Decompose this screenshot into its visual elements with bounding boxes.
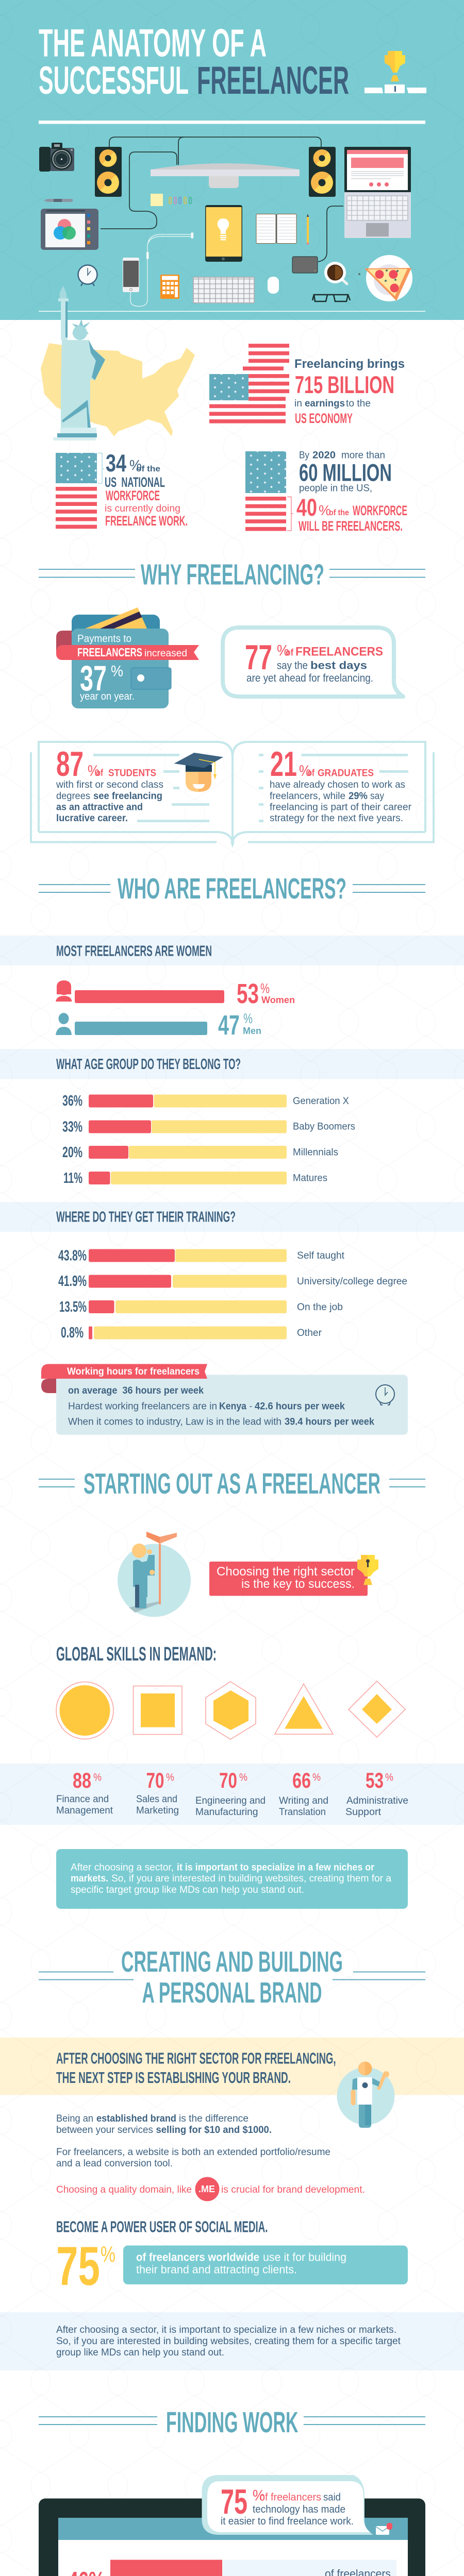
- icon: paperclips: [169, 197, 191, 204]
- stat: 715 billion: Freelancing brings: [294, 357, 405, 371]
- panel: working hours: Working hours for freelancers: [67, 1366, 200, 1377]
- heading: finding work: FINDING WORK: [166, 2406, 298, 2439]
- chart: age group bars: Generation X: [293, 1096, 349, 1107]
- panel: tablet with work sources: [39, 2475, 425, 2576]
- stats: skills percentages: 70: [219, 1768, 237, 1792]
- callout: 75 percent technology: %: [253, 2487, 265, 2504]
- icon: diamond shape: [349, 1681, 405, 1737]
- panel: open book stats: [31, 742, 434, 848]
- icon: smartphone: [123, 258, 139, 292]
- heading: why freelancing: WHY FREELANCING?: [141, 558, 324, 591]
- stats: skills percentages: Finance and: [56, 1794, 109, 1805]
- chart: gender bars: Women: [261, 995, 295, 1005]
- icon: desktop monitor: [151, 163, 300, 188]
- text: brand paragraphs: is the difference: [179, 2113, 248, 2124]
- icon: left speaker: [95, 147, 122, 197]
- text: brand paragraphs: is crucial for brand development.: [221, 2184, 365, 2195]
- text: specialize band: After choosing a sector, it is important to specialize in a few niches or markets.: [56, 2325, 396, 2335]
- callout: choosing the right sector: Choosing the right sector: [217, 1565, 355, 1579]
- stats: skills percentages: Translation: [279, 1807, 326, 1818]
- page lines: [93, 754, 408, 822]
- stats: skills percentages: Writing and: [279, 1795, 328, 1806]
- icon: USA map: [41, 343, 195, 436]
- stat: 21 percent graduates: freelancing is part of their career: [270, 802, 412, 813]
- stats: skills percentages: %: [312, 1771, 321, 1784]
- title: FREELANCER: [197, 59, 349, 103]
- icon: open notebook: [256, 214, 296, 243]
- stat: 60 million: WILL BE FREELANCERS.: [299, 518, 403, 534]
- icon: glasses: [312, 295, 350, 301]
- text: brand paragraphs: .ME: [198, 2184, 215, 2194]
- icon: trophy with keyhole: [357, 1555, 378, 1585]
- heading: training: WHERE DO THEY GET THEIR TRAINING?: [56, 1209, 236, 1225]
- callout: 77 percent speech bubble: [223, 628, 403, 697]
- panel: working hours: 39.4 hours per week: [285, 1417, 374, 1427]
- stats: skills percentages: 66: [292, 1768, 311, 1792]
- icon: keyboard: [193, 277, 255, 303]
- chart: training bars: 41.9%: [58, 1273, 87, 1290]
- chart: age group bars: Matures: [293, 1173, 327, 1184]
- icon: calculator: [160, 275, 179, 299]
- chart: gender bars: Men: [243, 1026, 261, 1036]
- stat: 60 million: WORKFORCE: [353, 503, 407, 518]
- text: brand paragraphs: and a lead conversion tool.: [56, 2158, 173, 2169]
- panel: working hours: -: [250, 1401, 252, 1412]
- stat: 87 percent students: 87: [56, 744, 84, 784]
- stat: 60 million: %: [319, 502, 331, 518]
- stat: 21 percent graduates: 29%: [349, 791, 368, 802]
- stat: 34 percent: is currently doing: [105, 503, 180, 514]
- chart: training bars: On the job: [297, 1302, 343, 1313]
- heading: social media: BECOME A POWER USER OF SOCIAL MEDIA.: [56, 2217, 268, 2236]
- heading: establishing your brand: [56, 2049, 336, 2087]
- callout: 77 percent speech bubble: say the: [277, 659, 308, 672]
- stat: 87 percent students: degrees: [56, 791, 90, 802]
- stats: skills percentages: Marketing: [136, 1805, 179, 1816]
- icon: trophy on podium: [364, 51, 426, 93]
- stat: 87 percent students: [56, 744, 163, 824]
- callout: 75 percent technology: it easier to find freelance work.: [221, 2516, 354, 2527]
- icon: woman: [56, 980, 72, 1002]
- stat: 715 billion: to the: [346, 398, 371, 409]
- stat: 21 percent graduates: freelancers, while: [270, 791, 345, 802]
- stat: 715 billion: earnings: [305, 398, 345, 409]
- icon: pencil: [307, 214, 309, 244]
- icon: coffee cup: [324, 262, 347, 284]
- text: brand paragraphs: Being an: [56, 2113, 93, 2124]
- callout: 77 percent speech bubble: are yet ahead for freelancing.: [246, 672, 373, 684]
- icon: hard drive: [292, 257, 318, 273]
- flag: earnings: [209, 344, 289, 423]
- heading: creating and building a personal brand: A PERSONAL BRAND: [142, 1976, 322, 2009]
- book outline: [31, 742, 434, 842]
- chart: age group bars: 33%: [62, 1119, 82, 1136]
- heading: establishing your brand: THE NEXT STEP IS ESTABLISHING YOUR BRAND.: [56, 2069, 291, 2087]
- panel: specialize note: it is important to specialize in a few niches or: [177, 1862, 375, 1873]
- callout: 77 percent speech bubble: 77: [245, 638, 272, 677]
- icon: clock: [376, 1385, 394, 1405]
- chart: training bars: 43.8%: [58, 1248, 87, 1264]
- chart: age group bars: 36%: [62, 1093, 82, 1109]
- stat: 21 percent graduates: have already chosen to work as: [270, 779, 405, 790]
- band: specialise text: [0, 2312, 464, 2370]
- stats: skills percentages: [56, 1768, 408, 1818]
- icon: shield shape: [206, 1682, 256, 1739]
- stats: skills percentages: 53: [366, 1768, 384, 1792]
- icon: laptop: [344, 147, 411, 238]
- band: age group: [0, 1049, 464, 1079]
- panel: wallet payments: 37: [80, 658, 107, 698]
- stat: 34 percent: 34: [106, 449, 126, 477]
- stat: 34 percent: US NATIONAL: [105, 474, 165, 490]
- text: brand paragraphs: established brand: [96, 2113, 176, 2124]
- stat: 75 percent social: use it for building: [263, 2250, 346, 2264]
- panel: wallet payments: year on year.: [80, 691, 135, 702]
- chart: gender bars: [56, 978, 295, 1041]
- chart: age group bars: 20%: [62, 1144, 82, 1161]
- panel: working hours: When it comes to industry, Law is in the lead with: [68, 1417, 281, 1427]
- callout: 75 percent technology: technology has made: [253, 2504, 345, 2515]
- stat: 87 percent students: STUDENTS: [108, 768, 156, 779]
- panel: specialize note: markets.: [71, 1873, 108, 1884]
- stats: skills percentages: %: [385, 1771, 393, 1784]
- stat: 60 million: 60 MILLION: [299, 459, 392, 486]
- panel: specialize note: After choosing a sector,: [71, 1862, 174, 1873]
- chart: age group bars: Baby Boomers: [293, 1121, 355, 1132]
- stat: 715 billion: in: [294, 398, 302, 409]
- stat: 87 percent students: as an attractive and: [56, 802, 143, 813]
- stats: skills percentages: Management: [56, 1805, 113, 1816]
- title: SUCCESSFUL: [39, 59, 189, 103]
- stat: 21 percent graduates: 21: [270, 744, 297, 784]
- icon: square shape: [133, 1686, 182, 1734]
- chart: training bars: Self taught: [297, 1250, 345, 1261]
- stat: 60 million: [296, 450, 407, 534]
- flag: 34 percent: [56, 453, 104, 529]
- callout: 77 percent speech bubble: FREELANCERS: [295, 645, 383, 658]
- icon: mouse: [268, 277, 279, 294]
- callout: 77 percent speech bubble: best days: [310, 659, 367, 672]
- text: brand paragraphs: selling for $10 and $1000.: [156, 2125, 272, 2136]
- panel: working hours: on average 36 hours per week: [68, 1385, 204, 1396]
- stat: 60 million: more than: [341, 450, 385, 461]
- stats: skills percentages: 70: [146, 1768, 164, 1792]
- stat: 87 percent students: of: [96, 768, 104, 778]
- stats: skills percentages: Support: [345, 1807, 382, 1818]
- icon: camera: [39, 143, 74, 172]
- chart: gender bars: %: [260, 981, 270, 996]
- header background: [0, 0, 464, 320]
- text: specialize band: [56, 2325, 401, 2358]
- text: brand paragraphs: [56, 2113, 365, 2201]
- panel: wallet payments: FREELANCERS: [77, 646, 142, 659]
- chart: training bars: 13.5%: [59, 1299, 87, 1315]
- stats: skills percentages: 88: [73, 1768, 91, 1792]
- stat: 34 percent: of the: [136, 465, 160, 473]
- stat: 21 percent graduates: say: [370, 791, 384, 802]
- icon: pizza plate: [358, 255, 412, 301]
- chart: gender bars: 47: [218, 1010, 240, 1041]
- skills shapes: [56, 1681, 405, 1739]
- heading: global skills: GLOBAL SKILLS IN DEMAND:: [56, 1643, 217, 1665]
- callout: 77 percent speech bubble: %: [277, 642, 289, 659]
- icon: statue of liberty: [53, 286, 105, 440]
- stat: 75 percent social: of freelancers worldwide: [136, 2250, 259, 2264]
- chart: gender bars: %: [243, 1011, 253, 1026]
- stat: 34 percent: %: [129, 457, 142, 473]
- callout: 77 percent speech bubble: of: [286, 647, 294, 657]
- stat: 60 million: people in the US,: [299, 483, 372, 494]
- stat: 87 percent students: see freelancing: [93, 791, 162, 802]
- stats: skills percentages: %: [239, 1771, 247, 1784]
- text: brand paragraphs: between your services: [56, 2125, 153, 2136]
- heading: age group: WHAT AGE GROUP DO THEY BELONG TO?: [56, 1056, 241, 1073]
- stat: 75 percent social: [56, 2235, 408, 2297]
- icon: person at signpost: [118, 1532, 191, 1617]
- icon: graphics tablet: [41, 209, 98, 250]
- chart: gender bars: 53: [237, 978, 259, 1009]
- flag: 2020 projection: [245, 451, 293, 531]
- title: [39, 22, 349, 103]
- panel: wallet payments: [56, 607, 199, 708]
- stat: 60 million: 40: [296, 494, 317, 521]
- icon: wires: [101, 137, 343, 262]
- stat: 34 percent: [105, 449, 188, 529]
- stat: 21 percent graduates: of: [307, 768, 315, 778]
- icon: man: [56, 1013, 72, 1035]
- chart: training bars: 0.8%: [61, 1325, 84, 1341]
- icon: mail: [376, 2523, 392, 2535]
- stat: 87 percent students: lucrative career.: [56, 813, 128, 824]
- stat: 21 percent graduates: strategy for the next five years.: [270, 813, 403, 824]
- chart: training bars: [58, 1248, 407, 1341]
- desk illustration: [39, 137, 412, 306]
- stat: 34 percent: FREELANCE WORK.: [105, 513, 188, 529]
- stat: 715 billion: US ECONOMY: [295, 411, 353, 426]
- stat: 87 percent students: %: [88, 762, 100, 779]
- chart: training bars: Other: [297, 1328, 322, 1338]
- title: THE ANATOMY OF A: [39, 22, 267, 65]
- icon: circle shape: [56, 1682, 113, 1739]
- stats: skills percentages: %: [93, 1771, 102, 1784]
- stats: skills percentages: Manufacturing: [195, 1807, 258, 1818]
- panel: wallet payments: increased: [144, 648, 187, 659]
- chart: training bars: University/college degree: [297, 1276, 407, 1287]
- stat: 60 million: of the: [329, 509, 349, 517]
- icon: triangle shape: [275, 1684, 333, 1734]
- band: brand heading: [0, 2038, 464, 2095]
- icon: right speaker: [309, 147, 336, 197]
- stat: 75 percent social: %: [101, 2242, 115, 2267]
- callout: 75 percent technology: 75: [221, 2482, 247, 2521]
- panel: working hours: Kenya: [219, 1401, 246, 1412]
- icon: earphones cable: [130, 233, 193, 306]
- stat: 34 percent: WORKFORCE: [106, 488, 160, 503]
- panel: specialize note: So, if you are interested in building websites, creating them for a: [111, 1873, 391, 1884]
- stat: 21 percent graduates: GRADUATES: [318, 768, 374, 779]
- stat: 75 percent social: their brand and attracting clients.: [136, 2263, 297, 2276]
- white rule: [39, 121, 425, 124]
- callout: choosing the right sector: is the key to success.: [241, 1577, 355, 1591]
- band: most freelancers: [0, 936, 464, 965]
- callout: 75 percent technology: of freelancers: [259, 2492, 321, 2503]
- stat: 715 billion: [294, 357, 405, 426]
- panel: wallet payments: %: [111, 663, 123, 680]
- chart: age group bars: [62, 1093, 355, 1187]
- stat: 75 percent social: 75: [56, 2235, 100, 2297]
- icon: alarm clock: [78, 265, 97, 286]
- chart: age group bars: 11%: [63, 1170, 82, 1187]
- panel: working hours: Hardest working freelancers are in: [68, 1401, 217, 1412]
- heading: creating and building a personal brand: [39, 1945, 425, 2009]
- band: training: [0, 1202, 464, 1232]
- icon: waving person: [337, 2062, 395, 2128]
- panel: working hours: 42.6 hours per week: [255, 1401, 345, 1412]
- stat: 87 percent students: with first or second class: [56, 779, 163, 790]
- text: specialize band: So, if you are interested in building websites, creating them for a specific target: [56, 2336, 401, 2347]
- chart: finding work bars: [68, 2560, 396, 2576]
- icon: yellow tablet with bulb: [205, 205, 242, 262]
- callout: choosing the right sector: [209, 1555, 378, 1596]
- stat: 60 million: By: [299, 450, 309, 461]
- icon: sticky note: [151, 194, 163, 206]
- chart: age group bars: Millennials: [293, 1147, 338, 1158]
- text: specialize band: group like MDs can help you stand out.: [56, 2347, 224, 2358]
- stats: skills percentages: Engineering and: [195, 1795, 266, 1806]
- text: brand paragraphs: For freelancers, a website is both an extended portfolio/resume: [56, 2147, 330, 2158]
- stat: 21 percent graduates: [270, 744, 412, 824]
- text: brand paragraphs: Choosing a quality domain, like: [56, 2184, 192, 2195]
- panel: specialize note: [56, 1849, 408, 1909]
- stats: skills percentages: %: [166, 1771, 174, 1784]
- icon: graduate: [174, 753, 223, 792]
- stats: skills percentages: Administrative: [346, 1795, 408, 1806]
- thin white rule: [39, 311, 425, 312]
- icon: stylus: [44, 199, 73, 202]
- band: skills percentages: [0, 1764, 464, 1825]
- callout: 75 percent technology: [202, 2475, 373, 2535]
- panel: working hours: [41, 1364, 408, 1435]
- heading: most freelancers are women: MOST FREELANCERS ARE WOMEN: [56, 943, 212, 959]
- panel: specialize note: specific target group like MDs can help you stand out.: [71, 1885, 304, 1895]
- stat: 21 percent graduates: %: [299, 762, 311, 779]
- stat: 60 million: 2020: [312, 450, 336, 461]
- panel: wallet payments: Payments to: [77, 633, 131, 645]
- stat: 715 billion: 715 BILLION: [295, 371, 394, 398]
- stats: skills percentages: Sales and: [136, 1794, 177, 1805]
- callout: 75 percent technology: said: [323, 2492, 341, 2503]
